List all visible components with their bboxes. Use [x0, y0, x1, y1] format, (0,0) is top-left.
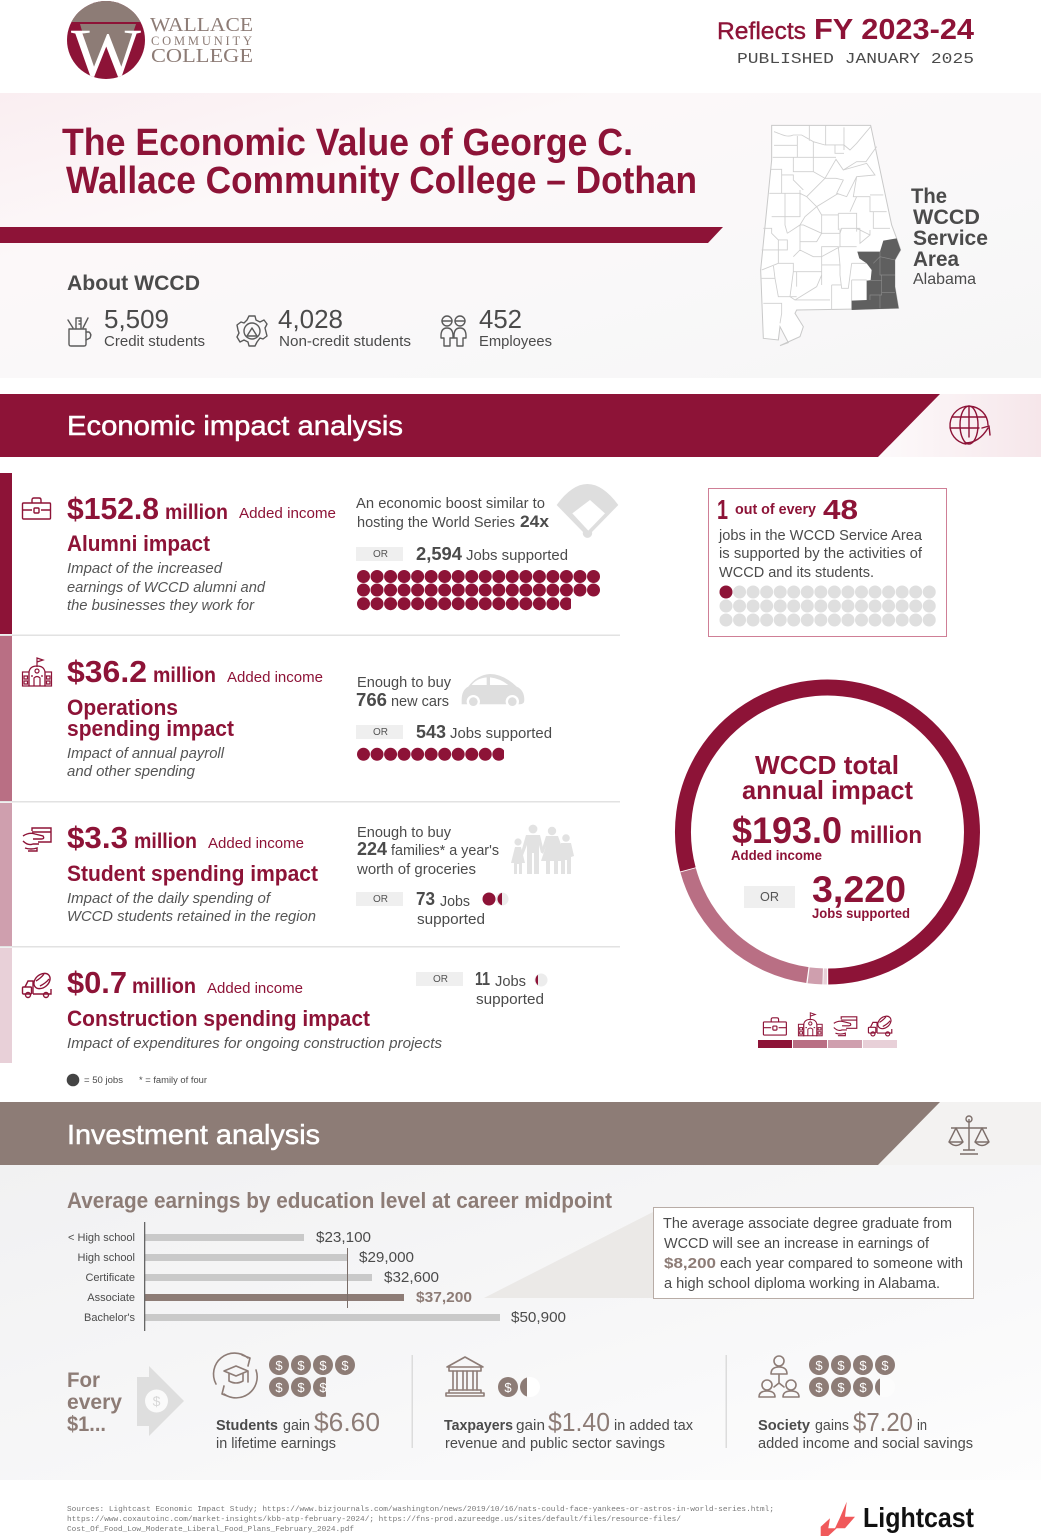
for every $1: $1...: [67, 1413, 106, 1436]
jobs supported: 73: [416, 889, 435, 909]
icon: briefcase: [22, 498, 50, 519]
added income: [67, 654, 323, 689]
comparison text: worth of groceries: [356, 861, 476, 878]
taxpayers text: revenue and public sector savings: [445, 1435, 665, 1452]
comparison text: [356, 495, 550, 531]
callout: 1 out of every 48: [708, 488, 946, 636]
added income: million: [165, 501, 228, 524]
fiscal year heading: FY 2023-24: [814, 14, 974, 46]
arrow with dollar: $: [153, 1393, 161, 1409]
bar chart: earnings by education: [68, 1222, 566, 1331]
callout: 1 out of every 48: out of every: [735, 501, 817, 518]
icon: scales: [949, 1116, 989, 1154]
callout: associate degree: The average associate degree graduate from: [663, 1215, 952, 1232]
donut text: $193.0: [732, 810, 842, 851]
jobs supported: Jobs supported: [466, 547, 568, 564]
OR tag: [356, 892, 403, 906]
title: Wallace Community College – Dothan: [66, 160, 697, 202]
students text: $6.60: [314, 1407, 380, 1437]
coins: $7.20: $: [859, 1380, 867, 1395]
comparison text: 766: [356, 690, 387, 710]
taxpayers text: [444, 1407, 693, 1452]
OR tag: OR: [373, 727, 388, 738]
donut text: annual impact: [742, 775, 913, 805]
divider: [0, 946, 620, 948]
job dots: [482, 892, 508, 906]
icon: baseball diamond: [557, 484, 618, 538]
comparison text: 224: [357, 839, 387, 859]
description: Impact of the daily spending of: [67, 890, 272, 907]
icon: people network: [759, 1356, 799, 1397]
coins: $6.60: $: [319, 1380, 327, 1395]
banner: economic impact analysis: [0, 394, 1041, 457]
donut text: Jobs supported: [812, 905, 910, 921]
map caption: Alabama: [913, 271, 976, 288]
arrow with dollar: [137, 1366, 184, 1436]
jobs supported: Jobs supported: [450, 725, 552, 742]
icon: family: [511, 825, 574, 874]
comparison text: [356, 674, 451, 710]
color key bar: [0, 948, 12, 1063]
OR tag: OR: [373, 549, 388, 560]
callout: associate degree: $8,200: [664, 1255, 716, 1272]
society text: gains: [815, 1417, 849, 1434]
bar chart: earnings by education: $32,600: [384, 1269, 439, 1286]
description: Impact of the increased: [67, 560, 223, 577]
job dots: [364, 576, 595, 611]
for every $1: For: [67, 1369, 100, 1392]
panel: construction spending impact: [0, 948, 548, 1063]
coins: $7.20: $: [859, 1358, 867, 1373]
taxpayers text: $1.40: [548, 1407, 610, 1437]
heading: Student spending impact: [67, 861, 319, 886]
added income: $152.8: [67, 491, 159, 526]
bar chart: earnings by education: Associate: [87, 1292, 135, 1304]
icon: cement truck: [22, 970, 53, 998]
jobs supported: Jobs: [440, 893, 470, 910]
about heading: About WCCD: [67, 272, 200, 295]
added income: million: [132, 975, 196, 998]
bar chart: earnings by education: $23,100: [316, 1229, 371, 1246]
donut key: [758, 1013, 897, 1048]
jobs supported: Jobs: [495, 973, 526, 990]
comparison text: families* a year's: [391, 842, 499, 859]
dots: 1 of 48: [720, 586, 932, 620]
description: Impact of annual payroll: [67, 745, 225, 762]
title rule: [0, 227, 723, 243]
coins: $7.20: $: [837, 1380, 845, 1395]
OR tag: [416, 972, 463, 986]
chart heading: Average earnings by education level at career midpoint: [67, 1188, 613, 1213]
heading: Alumni impact: [67, 531, 211, 556]
jobs supported: 2,594: [416, 544, 462, 564]
bar chart: earnings by education: Bachelor's: [84, 1312, 135, 1324]
college logo: COLLEGE: [151, 45, 253, 67]
added income: Added income: [227, 669, 323, 686]
college logo: WALLACE: [150, 14, 253, 36]
sources: [67, 1506, 774, 1534]
legend: * = family of four: [139, 1075, 207, 1085]
callout: 1 out of every 48: 1: [717, 494, 728, 525]
color key bar: [0, 803, 12, 946]
callout: associate degree: a high school diploma working in Alabama.: [664, 1275, 940, 1292]
callout: associate degree: WCCD will see an increase in earnings of: [664, 1235, 930, 1252]
icon: school: [22, 658, 52, 686]
bar chart: earnings by education: $50,900: [511, 1309, 566, 1326]
icon: pencil cup: [68, 318, 91, 346]
heading: spending impact: [67, 716, 235, 741]
bar chart: earnings by education: < High school: [68, 1232, 135, 1244]
added income: $36.2: [67, 654, 147, 689]
icon: graduate cycle: [214, 1353, 257, 1398]
fiscal year heading: Reflects: [717, 18, 806, 45]
description: [67, 890, 316, 925]
coins: $6.60: $: [319, 1358, 327, 1373]
donut chart: total annual impact: [683, 688, 972, 976]
sources: https://www.coxautoinc.com/market-insights/kbb-atp-february-2024/; https://fns-prod.azureedge.us/sites/default/files/resource-files/: [67, 1516, 682, 1524]
banner: economic impact analysis: Economic impact analysis: [67, 410, 403, 441]
coins: $6.60: $: [341, 1358, 349, 1373]
icon: globe: [950, 406, 990, 444]
added income: million: [153, 664, 216, 687]
divider: [0, 634, 620, 636]
job dots: [364, 746, 508, 762]
heading: Construction spending impact: [67, 1006, 371, 1031]
title: The Economic Value of George C.: [62, 122, 633, 164]
coins: $6.60: $: [275, 1380, 283, 1395]
coins: $1.40: $: [504, 1380, 512, 1395]
comparison text: [356, 824, 499, 878]
callout: 1 out of every 48: is supported by the activities of: [719, 545, 923, 562]
added income: Added income: [208, 835, 304, 852]
bar chart: earnings by education: Certificate: [85, 1272, 135, 1284]
added income: [67, 491, 336, 526]
stat: credit students: [104, 304, 205, 350]
donut text: 3,220: [812, 869, 906, 910]
title: [62, 122, 697, 202]
stat: credit students: 5,509: [104, 304, 169, 334]
icon: car: [462, 674, 524, 708]
OR tag: [356, 725, 403, 739]
students text: gain: [283, 1417, 310, 1434]
taxpayers text: Taxpayers: [444, 1417, 513, 1434]
map caption: WCCD: [913, 206, 980, 229]
comparison text: Enough to buy: [357, 824, 451, 841]
map: Alabama service area: [761, 125, 901, 346]
society text: [758, 1407, 973, 1452]
jobs supported: supported: [476, 991, 544, 1008]
comparison text: hosting the World Series: [357, 514, 515, 531]
panel: operations spending impact: [0, 636, 552, 801]
added income: [67, 820, 304, 855]
OR tag: [356, 547, 403, 561]
coins: $7.20: $: [815, 1380, 823, 1395]
jobs supported: 543: [416, 722, 446, 742]
callout: associate degree: each year compared to someone with: [720, 1255, 963, 1272]
heading: Operations: [67, 695, 178, 720]
comparison text: new cars: [391, 693, 449, 710]
coins: $6.60: $: [297, 1380, 305, 1395]
coins: $6.60: $: [297, 1358, 305, 1373]
description: earnings of WCCD alumni and: [67, 579, 266, 596]
map caption: [911, 185, 988, 288]
icon: gear: [237, 316, 267, 346]
color key bar: [0, 636, 12, 801]
panel: hero background: [0, 93, 1041, 378]
Lightcast logo: [821, 1502, 974, 1536]
OR tag: OR: [373, 894, 388, 905]
banner: investment analysis: [0, 1102, 1041, 1165]
fiscal year heading: [717, 14, 974, 46]
students text: [216, 1407, 380, 1452]
map caption: The: [911, 185, 947, 208]
jobs supported: [416, 889, 485, 928]
added income: [67, 965, 303, 1000]
added income: Added income: [239, 505, 336, 522]
divider: [0, 801, 620, 802]
banner: investment analysis: Investment analysis: [67, 1119, 320, 1150]
panel: investment background: [0, 1165, 1041, 1480]
added income: $3.3: [67, 820, 128, 855]
panel: taxpayers gain: [444, 1357, 693, 1452]
bar chart: earnings by education: $37,200: [416, 1289, 472, 1306]
bar chart: earnings by education: High school: [78, 1252, 135, 1264]
comparison text: An economic boost similar to: [356, 495, 545, 512]
callout: 1 out of every 48: WCCD and its students.: [719, 564, 874, 581]
job dot: [534, 974, 548, 986]
icon: government building: [446, 1357, 484, 1396]
students text: Students: [216, 1417, 278, 1434]
callout: 1 out of every 48: 48: [823, 494, 858, 525]
stat: employees: Employees: [479, 333, 552, 350]
map caption: Service: [913, 227, 988, 250]
comparison text: 24x: [520, 512, 550, 531]
description: [67, 560, 266, 614]
panel: students gain: [214, 1353, 380, 1452]
legend: = 50 jobs: [84, 1075, 124, 1085]
stat: employees: 452: [479, 304, 522, 334]
students text: in lifetime earnings: [216, 1435, 336, 1452]
published date: PUBLISHED JANUARY 2025: [737, 51, 974, 68]
added income: $0.7: [67, 965, 127, 1000]
heading: [67, 695, 235, 741]
panel: student spending impact: [0, 803, 574, 946]
Lightcast logo: Lightcast: [863, 1502, 974, 1533]
donut text: WCCD total: [755, 750, 899, 780]
stat: non-credit students: [278, 304, 411, 350]
icon: employees: [441, 316, 466, 346]
donut text: Added income: [731, 847, 822, 863]
coins: $7.20: $: [815, 1358, 823, 1373]
taxpayers text: gain: [516, 1417, 545, 1434]
college logo: [67, 1, 252, 79]
bar chart: earnings by education: $29,000: [359, 1249, 414, 1266]
added income: Added income: [207, 980, 303, 997]
panel: society gains: [758, 1355, 973, 1452]
comparison text: Enough to buy: [357, 674, 451, 691]
callout: 1 out of every 48: jobs in the WCCD Service Area: [718, 527, 923, 544]
stat: non-credit students: Non-credit students: [279, 333, 411, 350]
for every $1: every: [67, 1391, 122, 1414]
coins: $6.60: [269, 1355, 355, 1397]
sources: Sources: Lightcast Economic Impact Study; https://www.bizjournals.com/washington/news/2019/10/16/nats-could-face-yankees-or-astros-in-world-series.html;: [67, 1506, 774, 1514]
jobs supported: [475, 969, 544, 1008]
coins: $7.20: $: [881, 1358, 889, 1373]
icon: hand with card: [23, 828, 51, 851]
pointer triangle: [484, 1212, 653, 1298]
description: the businesses they work for: [67, 597, 255, 614]
coins: $6.60: $: [275, 1358, 283, 1373]
jobs supported: supported: [417, 911, 485, 928]
coins: $7.20: $: [837, 1358, 845, 1373]
society text: added income and social savings: [758, 1435, 973, 1452]
donut text: [731, 750, 922, 921]
taxpayers text: in added tax: [614, 1417, 693, 1434]
donut text: million: [850, 822, 922, 849]
for every $1: [67, 1369, 122, 1436]
stat: credit students: Credit students: [104, 333, 205, 350]
panel: about WCCD: [67, 272, 552, 350]
description: WCCD students retained in the region: [67, 908, 316, 925]
legend: [67, 1074, 207, 1086]
society text: $7.20: [853, 1407, 913, 1437]
donut text: OR: [760, 889, 779, 904]
panel: alumni impact: [0, 473, 618, 634]
college logo: COMMUNITY: [151, 34, 252, 48]
college logo: W: [71, 14, 141, 94]
jobs supported: 11: [475, 969, 490, 989]
society text: in: [917, 1417, 927, 1434]
description: Impact of expenditures for ongoing construction projects: [67, 1035, 442, 1052]
society text: Society: [758, 1417, 811, 1434]
stat: employees: [479, 304, 552, 350]
callout: associate degree: [654, 1208, 974, 1298]
coins: $7.20: [809, 1355, 895, 1397]
color key bar: [0, 473, 12, 634]
OR tag: OR: [433, 974, 448, 985]
map caption: Area: [913, 248, 959, 271]
coins: $1.40: [498, 1377, 527, 1397]
added income: million: [134, 830, 197, 853]
jobs supported: [416, 544, 568, 564]
sources: Cost_Of_Food_Low_Moderate_Liberal_Food_Plans_February_2024.pdf: [67, 1526, 355, 1534]
description: and other spending: [67, 763, 196, 780]
jobs supported: [416, 722, 552, 742]
description: [67, 745, 225, 780]
stat: non-credit students: 4,028: [278, 304, 343, 334]
